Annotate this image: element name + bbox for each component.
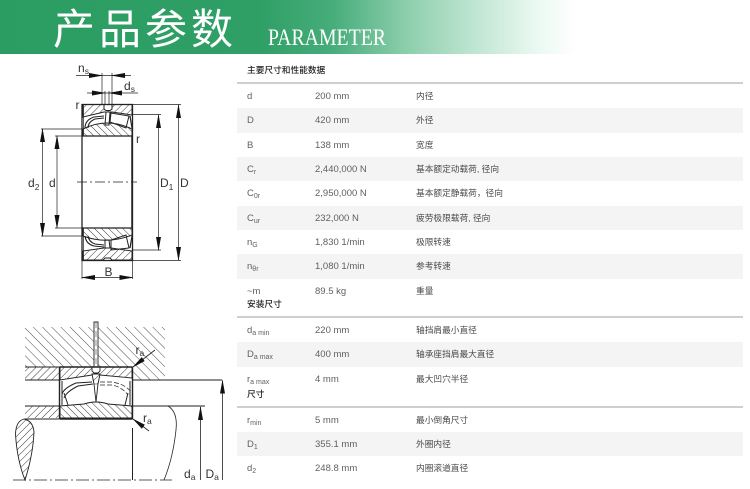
row mass — [247, 286, 434, 309]
mounting labels: d — [184, 467, 191, 481]
mounting labels: a — [140, 348, 144, 358]
mounting labels: D — [206, 467, 214, 481]
row ra max — [247, 374, 468, 399]
row d2 — [247, 463, 468, 475]
dimension: d2 — [41, 129, 82, 236]
row mass: 安装尺寸 — [247, 299, 282, 309]
row D: 外径 — [416, 115, 433, 125]
row D1: 外圈内径 — [416, 439, 451, 449]
drawing labels: B — [104, 265, 113, 279]
row D — [237, 108, 743, 133]
row d — [247, 91, 434, 102]
dimension: d — [55, 136, 82, 228]
row B — [247, 140, 433, 151]
row Da max — [237, 342, 743, 367]
row D: D — [247, 115, 254, 126]
row da min: 220 mm — [315, 325, 349, 336]
centre line — [13, 479, 172, 481]
row r min: 最小倒角尺寸 — [416, 415, 468, 425]
mounting labels: a — [191, 472, 196, 482]
shaft section — [16, 419, 34, 480]
mounting labels: a — [214, 472, 219, 482]
row B: 138 mm — [315, 140, 349, 151]
leader: ra top — [133, 350, 155, 367]
row da min: da min — [247, 325, 269, 337]
row D1: D1 — [247, 439, 258, 451]
mounting labels — [136, 343, 219, 482]
dimension: D1 — [132, 114, 161, 250]
row nG: 1,830 1/min — [315, 237, 365, 248]
row ra max: 尺寸 — [247, 389, 264, 399]
row nG — [247, 237, 451, 249]
row d: 200 mm — [315, 91, 349, 102]
shaft — [25, 406, 205, 480]
dimension: da — [200, 407, 202, 480]
row r min: 5 mm — [315, 415, 339, 426]
drawing labels — [28, 61, 189, 279]
mounting labels: r — [136, 343, 140, 357]
drawing labels: n — [78, 61, 85, 75]
dimension: ns — [76, 73, 131, 104]
dimension: D — [132, 104, 181, 260]
row Cur — [237, 206, 743, 230]
row da min: 轴挡肩最小直径 — [416, 325, 477, 335]
row d: 内径 — [416, 91, 433, 101]
drawing labels: s — [131, 84, 135, 94]
axis centre line — [77, 181, 137, 183]
row n0r — [237, 254, 743, 279]
row mass: ~m — [247, 286, 260, 297]
row D: 420 mm — [315, 115, 349, 126]
dimension: Da — [222, 380, 224, 480]
drawing labels: 2 — [35, 182, 40, 192]
row n0r: 参考转速 — [416, 261, 451, 271]
technical drawing: bearing cross-section — [28, 61, 189, 280]
row Cur: 232,000 N — [315, 213, 359, 224]
drawing labels: s — [85, 66, 89, 76]
row B: 宽度 — [416, 140, 433, 150]
drawing labels: 1 — [169, 182, 174, 192]
mounting labels: a — [147, 416, 152, 426]
drawing labels: d — [28, 176, 35, 190]
leader: ra bottom — [133, 419, 149, 431]
row D1: 355.1 mm — [315, 439, 357, 450]
row nG: 极限转速 — [416, 237, 451, 247]
row mass: 重量 — [416, 286, 433, 296]
bearing — [60, 367, 132, 419]
row r min: rmin — [247, 415, 261, 427]
row Da max: 400 mm — [315, 349, 349, 360]
row da min — [247, 325, 477, 337]
housing — [25, 322, 222, 380]
subtitle: PARAMETER — [268, 25, 386, 50]
row C0r: 2,950,000 N — [315, 188, 367, 199]
header banner — [0, 0, 575, 54]
row ra max: 最大凹穴半径 — [416, 374, 468, 384]
row nG: nG — [247, 237, 258, 249]
technical drawing: mounting arrangement — [13, 322, 225, 482]
row n0r: 1,080 1/min — [315, 261, 365, 272]
row d2: d2 — [247, 463, 256, 475]
drawing labels: r — [76, 98, 80, 112]
row Cr: Cr — [247, 164, 256, 176]
row d: d — [247, 91, 252, 102]
row Cr — [237, 157, 743, 181]
bearing body — [82, 104, 132, 260]
row Da max: Da max — [247, 349, 273, 361]
drawing labels: r — [136, 132, 140, 146]
row d2: 内圈滚道直径 — [416, 463, 468, 473]
drawing labels: D — [160, 176, 169, 190]
drawing labels: D — [180, 176, 189, 190]
drawing labels: d — [49, 176, 56, 190]
row ra max: ra max — [247, 374, 269, 386]
row d2: 248.8 mm — [315, 463, 357, 474]
row C0r: 基本额定静载荷，径向 — [416, 188, 503, 198]
dimension: ds — [87, 91, 138, 104]
row C0r: C0r — [247, 188, 260, 200]
row Cr: 2,440,000 N — [315, 164, 367, 175]
row Da max: 轴承座挡肩最大直径 — [416, 349, 494, 359]
drawing labels: d — [124, 79, 131, 93]
row mass: 89.5 kg — [315, 286, 346, 297]
row Cr: 基本额定动载荷, 径向 — [416, 164, 499, 174]
row B: B — [247, 140, 253, 151]
heading: main dimensions: 主要尺寸和性能数据 — [247, 65, 325, 75]
row Cur: Cur — [247, 213, 260, 225]
row Cur: 疲劳极限载荷, 径向 — [416, 213, 490, 223]
row r min — [247, 415, 468, 427]
mounting labels: r — [143, 411, 147, 425]
row n0r: nθr — [247, 261, 259, 273]
row ra max: 4 mm — [315, 374, 339, 385]
dimension: B — [82, 260, 132, 279]
row D1 — [237, 432, 743, 456]
row C0r — [247, 188, 503, 200]
